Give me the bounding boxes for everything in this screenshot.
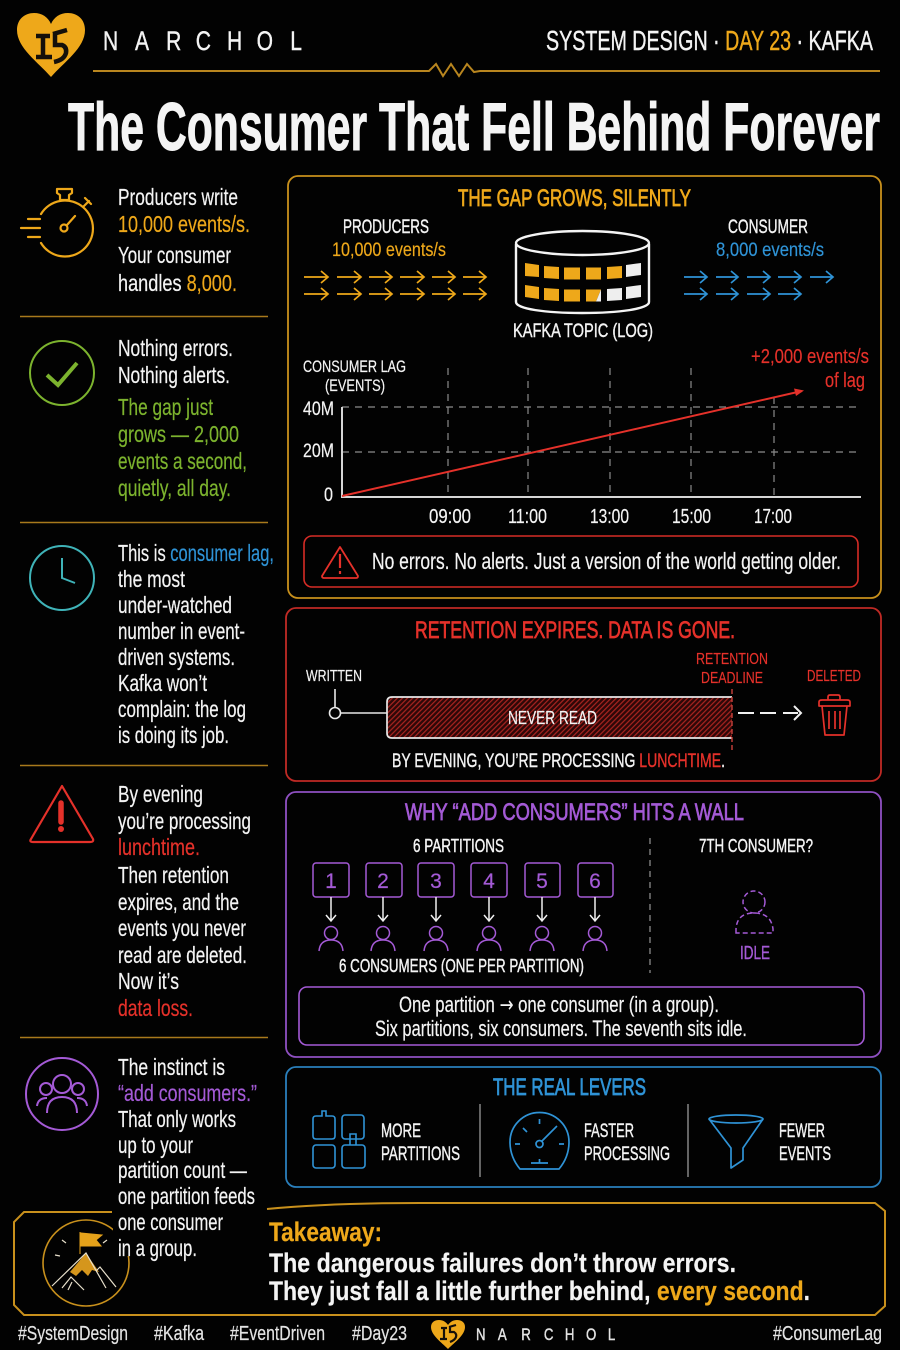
rule box: Six partitions, six consumers. The seventh sits idle. [375, 1016, 747, 1041]
kafka label: KAFKA TOPIC (LOG) [513, 321, 653, 342]
text: data loss: Then retention [118, 862, 229, 888]
takeaway frame [14, 1203, 885, 1315]
takeaway text [269, 1217, 810, 1306]
text: consumer lag: is doing its job. [118, 722, 229, 748]
text: consumer lag [118, 540, 274, 748]
x axis labels: 09:00 [429, 506, 471, 528]
written marker: WRITTEN [306, 668, 362, 685]
lever: more partitions [381, 1121, 460, 1165]
takeaway text: Takeaway: [269, 1217, 382, 1247]
text: add consumers: up to your [118, 1132, 193, 1158]
icon: partitions [313, 1111, 365, 1168]
y axis labels: 40M [303, 399, 334, 420]
written marker [306, 668, 387, 718]
partition numbers: 3 [430, 870, 442, 893]
lever: more partitions: MORE [381, 1121, 421, 1142]
evening caption: BY EVENING, YOU’RE PROCESSING LUNCHTIME. [392, 751, 725, 772]
icon: warning [322, 547, 358, 578]
panel heading: THE REAL LEVERS [493, 1074, 646, 1101]
kafka log cylinder [516, 231, 649, 313]
text: silent gap: Nothing errors. [118, 335, 233, 361]
takeaway text: They just fall a little further behind, every second. [269, 1276, 810, 1306]
y axis labels: 0 [324, 485, 333, 506]
producers label: 10,000 events/s [332, 240, 446, 261]
text: add consumers: one consumer [118, 1209, 223, 1235]
panel: the gap grows [288, 176, 881, 598]
text: data loss: expires, and the [118, 889, 239, 915]
text: add consumers: “add consumers.” [118, 1080, 257, 1106]
left column [20, 184, 274, 1261]
header [17, 13, 880, 77]
text: rates: 10,000 events/s. [118, 211, 250, 237]
text: consumer lag: complain: the log [118, 696, 246, 722]
takeaway badge [43, 1220, 129, 1306]
line chart: consumer lag [303, 346, 869, 528]
lever: more partitions: PARTITIONS [381, 1144, 460, 1165]
brand name: NARCHOL [103, 27, 302, 57]
panel heading: RETENTION EXPIRES. DATA IS GONE. [415, 617, 735, 644]
hashtag: system design: #SystemDesign [18, 1323, 128, 1345]
text: data loss: events you never [118, 915, 246, 941]
panel: the real levers [286, 1067, 881, 1187]
icon: stopwatch [21, 189, 93, 257]
text: data loss: lunchtime. [118, 834, 200, 860]
retention deadline: DEADLINE [701, 670, 763, 687]
logo heart [17, 13, 85, 77]
producers label: PRODUCERS [343, 217, 429, 238]
idle consumer icon [736, 891, 773, 933]
text: add consumers: in a group. [118, 1235, 197, 1261]
rule box [299, 987, 864, 1045]
consumer label [716, 217, 824, 261]
consumer arrows [684, 271, 833, 300]
text: consumer lag: Kafka won’t [118, 670, 207, 696]
axis title: (EVENTS) [325, 376, 385, 395]
text: rates [118, 184, 250, 296]
lag line [342, 391, 802, 496]
x axis labels: 11:00 [508, 506, 547, 528]
consumer label: CONSUMER [728, 217, 808, 238]
text: silent gap: grows — 2,000 [118, 421, 239, 447]
text: data loss: you’re processing [118, 808, 251, 834]
step 5: add consumers [26, 1054, 266, 1261]
step 3: consumer lag [30, 540, 274, 748]
lag annotation [751, 346, 869, 392]
x axis labels: 15:00 [672, 506, 711, 528]
partition numbers: 2 [377, 870, 389, 893]
text: data loss: By evening [118, 781, 203, 807]
icon: group [26, 1058, 98, 1130]
lever: faster processing: FASTER [584, 1121, 634, 1142]
icon: trash [819, 695, 850, 735]
lever: fewer events: EVENTS [779, 1144, 831, 1165]
lever: fewer events [779, 1121, 831, 1165]
badge circle [43, 1220, 129, 1306]
hashtag: kafka: #Kafka [154, 1323, 205, 1345]
mountains [52, 1240, 116, 1290]
consumers label: 6 CONSUMERS (ONE PER PARTITION) [339, 956, 584, 976]
series label: SYSTEM DESIGN · DAY 23 · KAFKA [546, 25, 873, 56]
step 2: silent [30, 335, 247, 501]
assignment arrows [326, 897, 600, 921]
panel: add consumers wall [286, 792, 881, 1057]
text: silent gap: The gap just [118, 394, 213, 420]
partition numbers: 1 [325, 870, 337, 893]
partition numbers: 5 [536, 870, 548, 893]
flag [80, 1232, 102, 1254]
text: silent gap: Nothing alerts. [118, 362, 230, 388]
text: consumer lag: under-watched [118, 592, 232, 618]
rule box: One partition → one consumer (in a group). [399, 992, 719, 1018]
icon: clock [30, 546, 94, 610]
footer brand: NARCHOL [476, 1326, 615, 1344]
text: silent gap: events a second, [118, 448, 247, 474]
partition numbers [325, 870, 601, 893]
icon: funnel [709, 1115, 763, 1168]
lever: fewer events: FEWER [779, 1121, 825, 1142]
x axis labels: 17:00 [754, 506, 792, 528]
consumer label: 8,000 events/s [716, 240, 824, 261]
lever: faster processing [584, 1121, 670, 1165]
hashtag: day 23: #Day23 [352, 1323, 407, 1345]
partition numbers: 6 [589, 870, 601, 893]
text: silent gap [118, 335, 247, 501]
lag annotation: +2,000 events/s [751, 346, 869, 368]
never read bar [387, 697, 732, 738]
never read bar: NEVER READ [508, 708, 597, 728]
producer arrows [304, 271, 486, 300]
text: add consumers: partition count — [118, 1157, 247, 1183]
takeaway text: The dangerous failures don’t throw errors. [269, 1248, 736, 1278]
partition numbers: 4 [483, 870, 495, 893]
step 1: rates [21, 184, 250, 296]
panel: retention [286, 608, 881, 781]
text: consumer lag: the most [118, 566, 185, 592]
deleted label: DELETED [807, 668, 861, 685]
footer logo [431, 1320, 465, 1349]
text: add consumers: one partition feeds [118, 1183, 255, 1209]
icon: check [30, 341, 94, 405]
seventh consumer label: 7TH CONSUMER? [699, 836, 813, 856]
text: silent gap: quietly, all day. [118, 475, 231, 501]
text: add consumers [118, 1054, 257, 1261]
idle label: IDLE [740, 943, 770, 963]
y axis labels: 20M [303, 441, 334, 462]
callout: no errors [304, 536, 858, 587]
hashtag: event driven: #EventDriven [230, 1323, 325, 1345]
footer [18, 1320, 882, 1349]
text: rates: Producers write [118, 184, 238, 210]
text: data loss: read are deleted. [118, 942, 247, 968]
header rule [93, 64, 880, 76]
retention deadline [696, 651, 768, 752]
text: consumer lag: This is consumer lag, [118, 540, 274, 566]
partitions label: 6 PARTITIONS [413, 836, 504, 856]
panel heading: WHY “ADD CONSUMERS” HITS A WALL [405, 799, 744, 826]
lag annotation: of lag [825, 370, 865, 392]
mask behind text [113, 1190, 266, 1256]
retention deadline: RETENTION [696, 651, 768, 668]
axis title: CONSUMER LAG [303, 357, 406, 376]
producers label [332, 217, 446, 261]
partition boxes [313, 863, 613, 897]
text: add consumers: The instinct is [118, 1054, 225, 1080]
icon: gauge [510, 1112, 569, 1169]
x axis labels: 13:00 [590, 506, 629, 528]
text: rates: handles 8,000. [118, 270, 237, 296]
text: data loss: Now it’s [118, 968, 179, 994]
y axis labels [303, 399, 334, 506]
text: consumer lag: number in event- [118, 618, 245, 644]
text: consumer lag: driven systems. [118, 644, 235, 670]
text: add consumers: That only works [118, 1106, 236, 1132]
text: data loss: data loss. [118, 995, 193, 1021]
consumer icons [319, 926, 607, 951]
icon: warning [30, 786, 93, 842]
panel heading: THE GAP GROWS, SILENTLY [458, 185, 691, 212]
text: data loss [118, 781, 251, 1021]
x axis labels [429, 506, 792, 528]
axis title [303, 357, 406, 395]
step 4: data loss [30, 781, 251, 1021]
lever: faster processing: PROCESSING [584, 1144, 670, 1165]
text: rates: Your consumer [118, 242, 231, 268]
dashed arrow [738, 706, 801, 720]
